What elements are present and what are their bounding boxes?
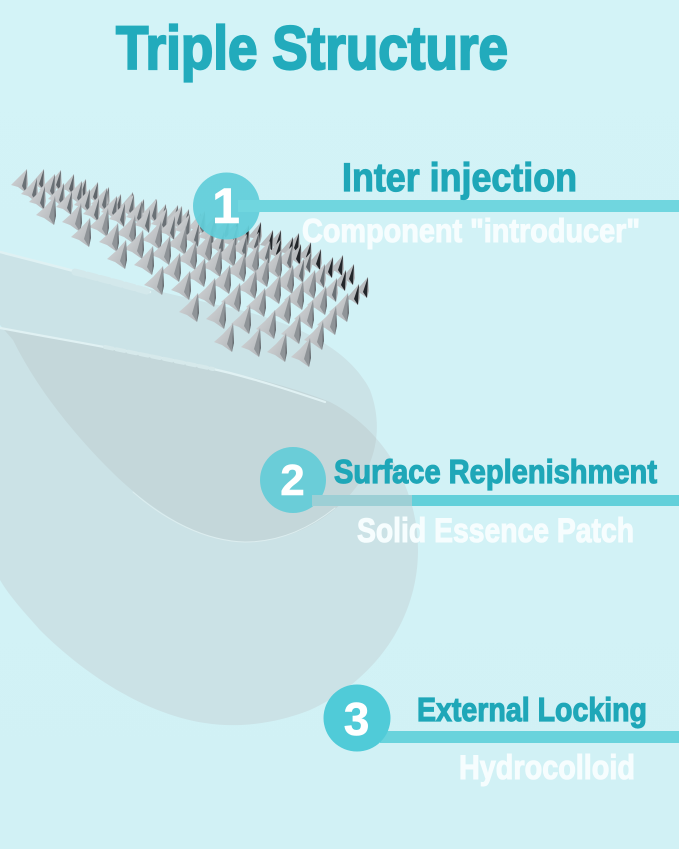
subheading 1: Component "introducer"	[302, 212, 640, 249]
patch layers	[0, 252, 418, 725]
subheading 3: Hydrocolloid	[459, 749, 635, 787]
callout 2: surface replenishment	[260, 447, 679, 550]
connector bar 2	[312, 495, 412, 506]
callout 3: external locking	[324, 684, 679, 787]
connector bar 3	[380, 731, 679, 743]
number 1: 1	[212, 178, 240, 234]
circle 1	[193, 172, 260, 240]
layer 2: solid essence patch	[0, 252, 377, 542]
heading 1: Inter injection	[342, 156, 577, 200]
heading 3: External Locking	[417, 691, 647, 728]
overlap of patches	[4, 330, 376, 542]
layer 3: large hydrocolloid patch	[0, 328, 418, 725]
number 2: 2	[280, 456, 305, 505]
microneedle array	[11, 169, 369, 367]
patch edge highlights	[0, 252, 335, 542]
callout 1: inter injection	[193, 156, 679, 249]
connector bar 1	[238, 200, 679, 212]
number 3: 3	[344, 693, 369, 745]
connector bar 2 bright segment	[412, 495, 679, 506]
circle 3	[324, 684, 390, 752]
title: Triple Structure	[116, 14, 508, 82]
circle 2	[260, 447, 326, 513]
